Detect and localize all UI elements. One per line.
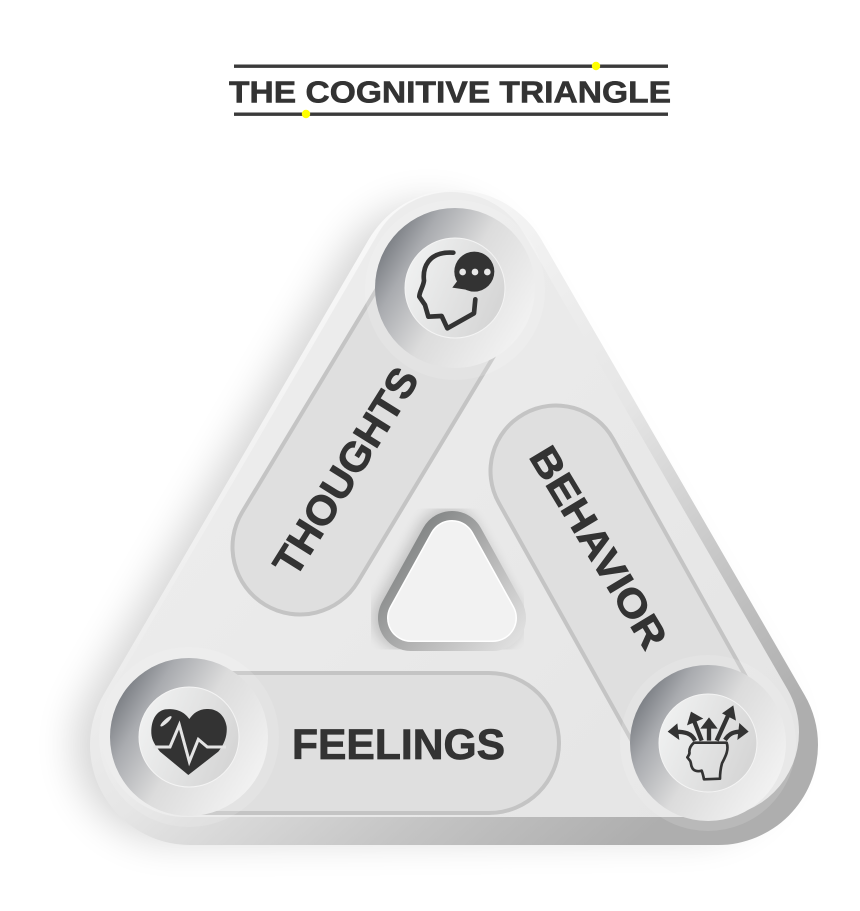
button halo [620, 655, 796, 831]
title top rule with yellow dot [234, 62, 668, 70]
recess highlight edge [411, 544, 493, 618]
drop shadow of plate [170, 300, 690, 745]
icon: heart with pulse [151, 709, 227, 775]
panel: feelings pill [189, 671, 489, 815]
recess center [411, 544, 493, 618]
plate rim [190, 290, 718, 745]
behavior button [620, 655, 796, 831]
panel: behavior pill [556, 471, 708, 743]
button ring [375, 208, 535, 368]
heading: thoughts: THOUGHTS [264, 359, 428, 584]
recess soft shadow [405, 540, 490, 618]
title [229, 62, 671, 118]
triangular plate [186, 277, 718, 745]
button halo [365, 200, 545, 380]
heading: feelings: FEELINGS [292, 721, 505, 769]
thoughts button [365, 200, 545, 380]
panel: thoughts pill [300, 290, 455, 547]
button center [139, 687, 239, 787]
icon: head with arrows [668, 705, 749, 779]
button center [659, 694, 757, 792]
plate face [186, 277, 714, 732]
title text: THE COGNITIVE TRIANGLE [229, 74, 671, 110]
title bottom rule with yellow dot [234, 110, 668, 118]
button halo [99, 647, 279, 827]
button ring [630, 665, 786, 821]
heading: behavior: BEHAVIOR [521, 439, 675, 657]
icon: head with speech bubble [419, 252, 494, 328]
button ring [110, 658, 268, 816]
feelings button [99, 647, 279, 827]
center triangle recess [405, 540, 493, 618]
recess ring [411, 544, 493, 618]
button center [405, 238, 505, 338]
